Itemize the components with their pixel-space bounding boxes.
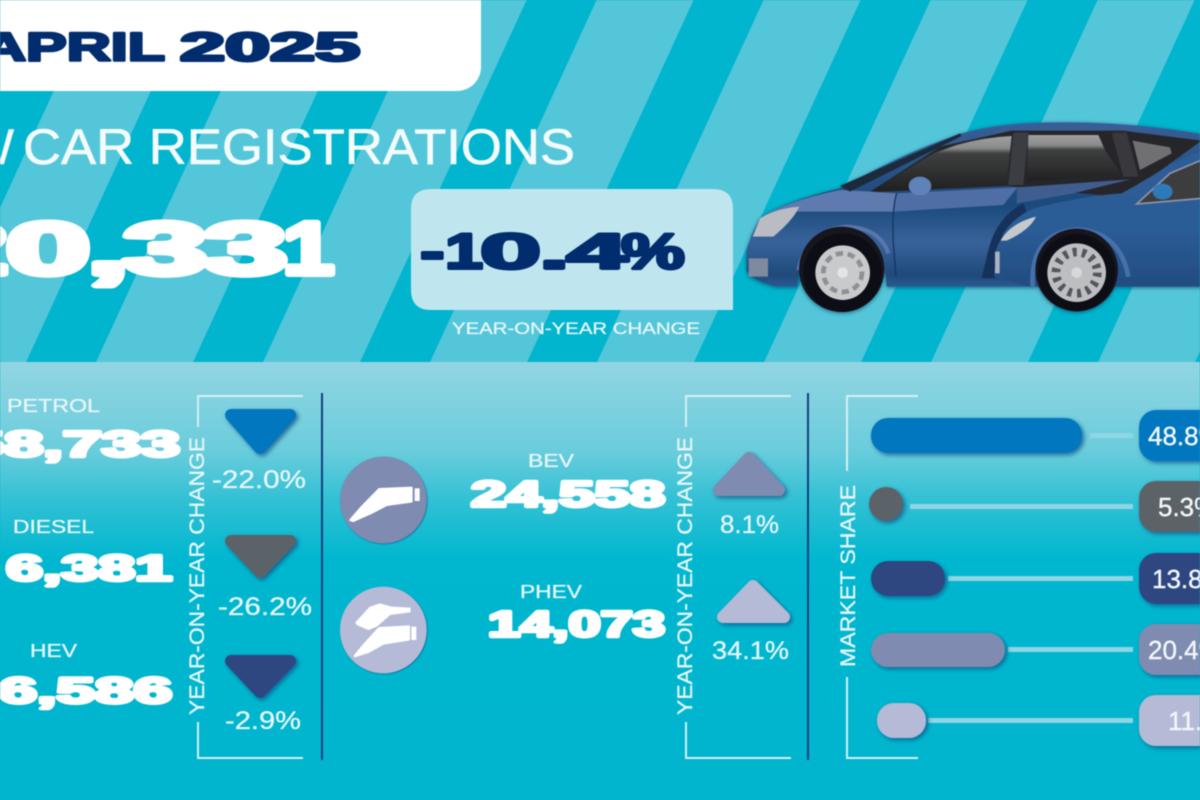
bracket: market share: MARKET SHARE (837, 485, 860, 667)
callout: year-on-year total change: YEAR-ON-YEAR CHANGE (452, 319, 700, 338)
bar hev (871, 561, 945, 596)
callout: year-on-year total change: - (420, 224, 444, 280)
striped top background (0, 0, 1200, 362)
phev change: 34.1% (712, 637, 789, 665)
panel: fuel year-on-year changes (212, 415, 312, 735)
petrol change: -22.0% (212, 466, 306, 494)
front car headlight (1001, 217, 1036, 241)
panel: electrified year-on-year changes (712, 458, 789, 665)
down triangle petrol (231, 415, 290, 448)
bracket: right year-on-year change (674, 396, 791, 758)
bracket: market share (837, 396, 918, 758)
bracket: left year-on-year change (186, 396, 303, 758)
date banner (0, 0, 481, 91)
divider line right (807, 393, 809, 760)
rear car headlight (753, 207, 799, 237)
value pill hev (1139, 553, 1200, 604)
value pill petrol (1139, 410, 1200, 461)
diesel change: -26.2% (218, 593, 312, 621)
gradient bottom background (0, 362, 1200, 800)
bev change: 8.1% (720, 511, 779, 539)
front car body (994, 148, 1200, 287)
icon: electric charger (340, 457, 427, 543)
rear car mirror (909, 177, 931, 195)
rear car fog lamp (749, 258, 768, 277)
rear car middle window (1027, 135, 1122, 182)
rear car dark greenhouse (868, 131, 1200, 197)
value pill phev (1139, 695, 1200, 746)
rear car hood highlight (760, 190, 897, 220)
rear car rear door top (1017, 179, 1130, 203)
phev value: 14,073 (488, 604, 665, 644)
bar phev (877, 703, 926, 738)
callout: year-on-year total change: % (621, 224, 685, 280)
date banner: 2025 (180, 26, 360, 70)
front car wheel (1033, 229, 1128, 311)
bar diesel (869, 487, 903, 521)
front car window (1137, 160, 1200, 204)
rear car wheel (798, 227, 888, 312)
rear car front window (872, 136, 1012, 191)
icon: fuel nozzle and charger (340, 587, 427, 673)
connector lines (910, 433, 1133, 723)
market share bar chart (869, 410, 1200, 746)
bar bev (871, 633, 1005, 667)
hev label: HEV (30, 641, 77, 661)
divider line left (321, 393, 323, 760)
panel: electrified volumes (471, 451, 665, 644)
rear car rear window (1133, 141, 1172, 170)
up triangle bev (719, 458, 779, 490)
up triangle phev (723, 586, 784, 617)
petrol label: PETROL (7, 396, 100, 416)
callout: year-on-year total change: 1 (445, 224, 483, 280)
callout: year-on-year total change (411, 189, 733, 338)
rear car front door top (893, 187, 1017, 212)
total registrations number: 1 (283, 208, 334, 290)
value pill diesel (1139, 481, 1200, 532)
front car mirror (1153, 184, 1173, 200)
rear car pillars and wiper (840, 133, 962, 192)
bev value: 24,558 (471, 474, 665, 514)
bracket: right year-on-year change: YEAR-ON-YEAR CHANGE (674, 437, 697, 715)
bev label: BEV (528, 451, 574, 471)
panel: petrol diesel hybrid volumes (0, 396, 180, 711)
front car bumper detail (995, 252, 1000, 273)
hev change: -2.9% (225, 707, 301, 735)
down triangle hev (231, 661, 290, 692)
diesel label: DIESEL (13, 517, 94, 537)
rear car body (747, 122, 1200, 287)
value pill bev (1139, 624, 1200, 675)
phev label: PHEV (520, 582, 582, 602)
callout: year-on-year total change: 0.4 (480, 224, 628, 280)
diesel value: 6,381 (6, 548, 172, 588)
rear car door seam (893, 193, 897, 277)
down triangle diesel (231, 541, 290, 572)
bracket: left year-on-year change: YEAR-ON-YEAR CHANGE (186, 437, 209, 715)
bar petrol (871, 418, 1082, 453)
illustration: two blue cars (747, 122, 1200, 312)
rear car door shadow (982, 203, 1027, 278)
heading: new car registrations: CAR REGISTRATIONS (23, 119, 575, 175)
